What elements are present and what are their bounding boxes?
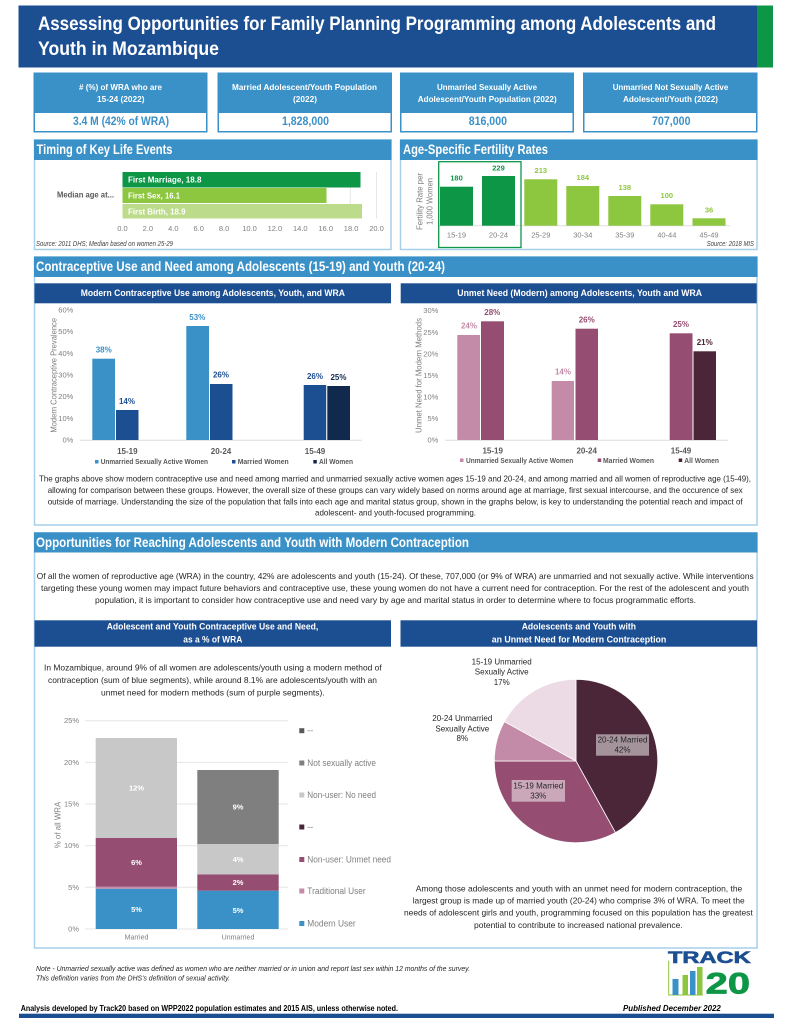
explanatory text: largest group is made up of married youth (20-24) who comprise 3% of WRA. To meet the xyxy=(413,896,745,906)
x axis labels: 18.0 xyxy=(344,224,358,233)
bar: unmarried xyxy=(197,770,279,929)
categories xyxy=(482,446,692,456)
panel: opportunities for reaching adolescents and youth: Opportunities for Reaching Adolescents and Youth with Modern Contraception xyxy=(36,535,469,550)
fertility values: 100 xyxy=(661,191,673,200)
stat card: WRA 15-24: # (%) of WRA who are xyxy=(79,82,162,92)
fertility values: 184 xyxy=(577,173,590,182)
x axis labels: 16.0 xyxy=(318,224,333,233)
bar: first birth: First Birth, 18.9 xyxy=(128,208,186,216)
pie label: 15-19 unmarried: 17% xyxy=(494,678,510,687)
bar: unmarried: 5% xyxy=(233,906,244,915)
note xyxy=(36,966,470,982)
explanatory text: contraception (sum of blue segments), while around 8.1% are adolescents/youth with an xyxy=(48,675,377,685)
stat card: unmarried not sexually active: 707,000 xyxy=(652,116,690,128)
chart: unmet need: Unmet Need (Modern) among Adolescents, Youth and WRA xyxy=(457,288,702,299)
explanatory text xyxy=(44,663,382,698)
pie label: 20-24 unmarried: Sexually Active xyxy=(435,724,490,734)
legend: Modern User xyxy=(307,918,356,928)
legend: Married Women xyxy=(238,457,289,466)
logo: Track20: TRACK xyxy=(668,949,751,967)
stat card: WRA 15-24 xyxy=(34,72,208,132)
data labels: 38% xyxy=(96,346,112,354)
legend: All Women xyxy=(684,456,719,465)
pie label: 20-24 married: 42% xyxy=(614,746,631,754)
pie label: 20-24 married xyxy=(596,734,649,756)
bar: married: 6% xyxy=(131,858,142,867)
legend: -- xyxy=(307,822,313,832)
subpanel: use and need as percent of WRA xyxy=(34,620,391,942)
subpanel: use and need as percent of WRA: Adolescent and Youth Contraceptive Use and Need, xyxy=(107,622,318,632)
highlight box: ages 15-24 xyxy=(439,162,521,248)
paragraph: opportunities intro: Of all the women of reproductive age (WRA) in the country, 42% are adolescents and youth (15-24). Of these, 707,000 (or 9% of WRA) are unmarried and not sexually active. While interventions xyxy=(37,571,754,581)
chart: modern contraceptive use: Modern Contraceptive Use among Adolescents, Youth, and WRA xyxy=(81,288,345,299)
legend: Not sexually active xyxy=(307,758,376,768)
y axis: 25% xyxy=(64,716,79,725)
y axis: 20% xyxy=(423,349,439,358)
pie label: 15-19 married: 15-19 Married xyxy=(513,782,563,790)
stat card: unmarried not sexually active: Unmarried Not Sexually Active xyxy=(613,82,729,92)
pie label: 20-24 unmarried xyxy=(432,714,492,743)
explanatory text: In Mozambique, around 9% of all women are adolescents/youth using a modern method of xyxy=(44,663,382,673)
data labels xyxy=(96,313,347,406)
categories: 15-49 xyxy=(671,446,692,456)
y axis: 0% xyxy=(62,436,74,444)
stat card: married population: (2022) xyxy=(293,94,317,104)
title banner: Youth in Mozambique xyxy=(38,38,219,60)
data labels: 26% xyxy=(307,372,323,381)
y axis: Unmet Need for Modern Methods xyxy=(413,318,423,433)
categories: Married xyxy=(125,934,148,942)
paragraph: opportunities intro xyxy=(37,571,754,605)
y axis: 30% xyxy=(423,306,439,315)
stat card: unmarried not sexually active: Adolescent/Youth (2022) xyxy=(623,94,718,104)
legend xyxy=(299,726,391,928)
y axis: 15% xyxy=(423,371,439,380)
bar: first marriage xyxy=(122,172,360,188)
panel: opportunities for reaching adolescents and youth xyxy=(34,532,758,948)
bar: married: 12% xyxy=(129,784,144,792)
source note: Source: 2011 DHS; Median based on women 25-29 xyxy=(36,241,173,248)
y axis title: Fertility Rate per xyxy=(416,173,424,230)
age group labels: 40-44 xyxy=(657,230,676,240)
categories: 20-24 xyxy=(576,446,597,456)
age group labels xyxy=(447,230,719,240)
paragraph: graph explanation: outside of marriage. Understanding the size of the population that falls into each age and marital status group, shown in the graphs below, is key to understanding the potential reach and impact of xyxy=(48,496,743,506)
pie label: 15-19 unmarried: Sexually Active xyxy=(475,668,529,676)
footer: analysis credit: Analysis developed by Track20 based on WPP2022 population estimates and 2015 AIS, unless otherwise noted. xyxy=(21,1004,398,1013)
data labels: 25% xyxy=(330,373,347,382)
paragraph: graph explanation xyxy=(39,473,751,518)
bar: first sex xyxy=(122,188,326,203)
subpanel: unmet need pie: an Unmet Need for Modern Contraception xyxy=(492,634,666,646)
explanatory text: potential to contribute to increased national prevalence. xyxy=(474,920,683,930)
pie label: 20-24 married: 20-24 Married xyxy=(598,736,647,744)
note: This definition varies from the DHS's definition of sexual activity. xyxy=(36,976,230,982)
categories: 15-49 xyxy=(305,447,326,456)
categories: Unmarried xyxy=(222,934,254,942)
age group labels: 35-39 xyxy=(615,230,634,240)
stat card: unmarried sexually active population: Unmarried Sexually Active xyxy=(437,82,537,92)
bar: unmarried: 2% xyxy=(233,878,244,887)
bar: first sex: First Sex, 16.1 xyxy=(128,192,181,200)
x axis labels: 4.0 xyxy=(168,224,179,233)
fertility values xyxy=(450,164,713,214)
y axis xyxy=(53,716,79,934)
pie label: 15-19 married xyxy=(512,780,565,802)
x axis labels: 14.0 xyxy=(293,224,308,233)
paragraph: graph explanation: The graphs above show modern contraceptive use and need among married and unmarried sexually active women ages 15-19 and 20-24, and among married and all women of reproductive age (15-49), xyxy=(39,473,751,483)
pie label: 20-24 unmarried: 20-24 Unmarried xyxy=(432,714,492,723)
bar: unmarried: 4% xyxy=(233,855,244,864)
subpanel: unmet need pie: Adolescents and Youth with xyxy=(522,622,636,632)
bar: first birth xyxy=(122,204,362,218)
y axis: 10% xyxy=(64,841,79,850)
legend: Non-user: No need xyxy=(307,790,376,800)
y axis: 5% xyxy=(427,414,439,423)
pie label: 20-24 unmarried: 8% xyxy=(457,734,468,743)
footer bar xyxy=(19,1014,774,1018)
explanatory text: unmet need for modern methods (sum of purple segments). xyxy=(101,688,325,698)
stat card: unmarried sexually active population: Adolescent/Youth Population (2022) xyxy=(418,94,557,104)
data labels: 53% xyxy=(189,313,205,322)
stacked bar chart xyxy=(53,716,391,942)
pie label: 15-19 unmarried: 15-19 Unmarried xyxy=(472,658,532,666)
data labels: 21% xyxy=(697,338,713,347)
y axis: 25% xyxy=(423,328,439,337)
fertility values: 138 xyxy=(619,183,631,192)
chart: unmet need xyxy=(401,283,757,465)
paragraph: graph explanation: allowing for comparison between these groups. However, the overall size of these groups can vary widely based on norms around age at marriage, first sexual intercourse, and the occurence of sex xyxy=(48,485,743,495)
age group labels: 30-34 xyxy=(573,230,592,240)
stat card: unmarried sexually active population xyxy=(400,72,574,132)
categories: 15-19 xyxy=(482,446,503,456)
x axis labels: 6.0 xyxy=(193,224,204,233)
legend: Traditional User xyxy=(307,886,366,896)
legend: Unmarried Sexually Active Women xyxy=(466,456,574,465)
y axis: 15% xyxy=(64,800,79,808)
paragraph: opportunities intro: population, it is important to consider how contraceptive use and need vary by age and marital status in order to determine where to focus programmatic efforts. xyxy=(95,595,696,605)
y axis: 40% xyxy=(58,349,74,358)
footer: publication date: Published December 2022 xyxy=(623,1004,721,1013)
pie label: 15-19 married: 33% xyxy=(530,792,546,800)
categories xyxy=(117,447,326,456)
x axis labels: 0.0 xyxy=(117,224,128,233)
y axis: 20% xyxy=(64,758,79,767)
source note: Source: 2018 MIS xyxy=(707,241,754,248)
bar: married: 5% xyxy=(131,905,142,914)
y axis: 5% xyxy=(68,883,79,892)
data labels xyxy=(461,308,713,376)
data labels: 26% xyxy=(579,316,595,324)
data labels: 26% xyxy=(213,370,229,380)
age group labels: 15-19 xyxy=(447,230,466,240)
y axis: 20% xyxy=(58,392,74,401)
y axis xyxy=(48,306,74,444)
chart: modern contraceptive use xyxy=(34,283,391,466)
panel: contraceptive use and need xyxy=(34,256,758,525)
paragraph: graph explanation: adolescent- and youth-focused programming. xyxy=(315,508,476,518)
y axis: 50% xyxy=(58,327,74,336)
x axis labels: 10.0 xyxy=(242,224,257,233)
y axis title: 1,000 Women xyxy=(426,178,434,225)
legend xyxy=(95,457,353,466)
categories xyxy=(125,934,254,942)
pie label: 15-19 unmarried xyxy=(472,658,532,687)
panel: age-specific fertility rates xyxy=(400,140,758,250)
x axis labels: 2.0 xyxy=(143,224,153,233)
x axis labels: 20.0 xyxy=(369,224,384,233)
panel: contraceptive use and need: Contraceptive Use and Need among Adolescents (15-19) and Youth (20-24) xyxy=(36,259,445,274)
legend: Married Women xyxy=(603,456,654,465)
y axis: 10% xyxy=(423,392,439,402)
fertility values: 36 xyxy=(705,206,713,214)
note: Note - Unmarried sexually active was defined as women who are neither married or in union and report last sex within 12 months of the survey. xyxy=(36,966,470,973)
fertility values: 180 xyxy=(450,174,463,182)
legend: All Women xyxy=(319,457,353,466)
bar: first marriage: First Marriage, 18.8 xyxy=(128,176,202,184)
stat card: WRA 15-24: 3.4 M (42% of WRA) xyxy=(73,116,169,128)
data labels: 14% xyxy=(555,368,571,376)
y axis: Modern Contraceptive Prevalence xyxy=(48,318,58,433)
paragraph: opportunities intro: targeting these young women may impact future behaviors and contraceptive use, these young women do not have a current need for contraception. For the rest of the adolescent and youth xyxy=(41,583,749,593)
data labels: 28% xyxy=(484,308,500,317)
bars xyxy=(457,321,716,440)
fertility values: 229 xyxy=(492,164,505,172)
explanatory text: needs of adolescent girls and youth, programming focused on this population has the greatest xyxy=(404,908,753,918)
panel: timing of key life events xyxy=(34,140,392,250)
categories: 20-24 xyxy=(211,447,232,456)
title banner xyxy=(18,6,773,68)
logo: Track20: 20 xyxy=(706,968,750,1000)
stat card: WRA 15-24: 15-24 (2022) xyxy=(97,94,145,104)
stat card: married population xyxy=(218,72,392,132)
explanatory text: Among those adolescents and youth with an unmet need for modern contraception, the xyxy=(416,884,743,894)
y axis: 0% xyxy=(68,924,79,934)
data labels: 25% xyxy=(673,320,689,329)
panel: age-specific fertility rates: Age-Specific Fertility Rates xyxy=(403,142,548,157)
legend: -- xyxy=(307,726,313,736)
y axis: 60% xyxy=(58,306,74,314)
panel: timing of key life events: Timing of Key Life Events xyxy=(36,142,172,157)
data labels: 14% xyxy=(119,397,135,406)
fertility values: 213 xyxy=(535,166,547,175)
legend: Unmarried Sexually Active Women xyxy=(101,457,208,466)
bars xyxy=(92,326,350,440)
row label: Median age at... xyxy=(57,190,114,200)
bar: unmarried: 9% xyxy=(233,802,244,812)
fertility bars xyxy=(440,176,726,226)
x axis labels xyxy=(117,224,384,233)
stat card: unmarried not sexually active xyxy=(583,72,758,132)
y axis: 30% xyxy=(58,370,74,380)
x axis labels: 12.0 xyxy=(268,224,282,233)
stat card: married population: Married Adolescent/Youth Population xyxy=(232,82,377,92)
stat card: married population: 1,828,000 xyxy=(282,116,329,128)
y axis title xyxy=(416,173,434,230)
logo: Track20 xyxy=(668,949,751,1000)
age group labels: 20-24 xyxy=(489,230,508,240)
pie chart xyxy=(494,679,658,843)
legend: Non-user: Unmet need xyxy=(307,854,391,864)
data labels: 24% xyxy=(461,322,477,330)
age group labels: 25-29 xyxy=(531,230,550,240)
y axis xyxy=(413,306,439,444)
subpanel: use and need as percent of WRA: as a % of WRA xyxy=(183,634,242,646)
age group labels: 45-49 xyxy=(699,230,719,240)
explanatory text xyxy=(404,884,753,930)
legend xyxy=(460,456,719,465)
bar: married xyxy=(96,738,177,929)
stat card: unmarried sexually active population: 816,000 xyxy=(469,116,507,128)
y axis: 0% xyxy=(427,436,439,444)
subpanel: unmet need pie xyxy=(400,620,757,930)
y axis: % of all WRA xyxy=(53,801,63,848)
categories: 15-19 xyxy=(117,447,138,456)
x axis labels: 8.0 xyxy=(219,224,229,233)
y axis: 10% xyxy=(58,414,74,423)
